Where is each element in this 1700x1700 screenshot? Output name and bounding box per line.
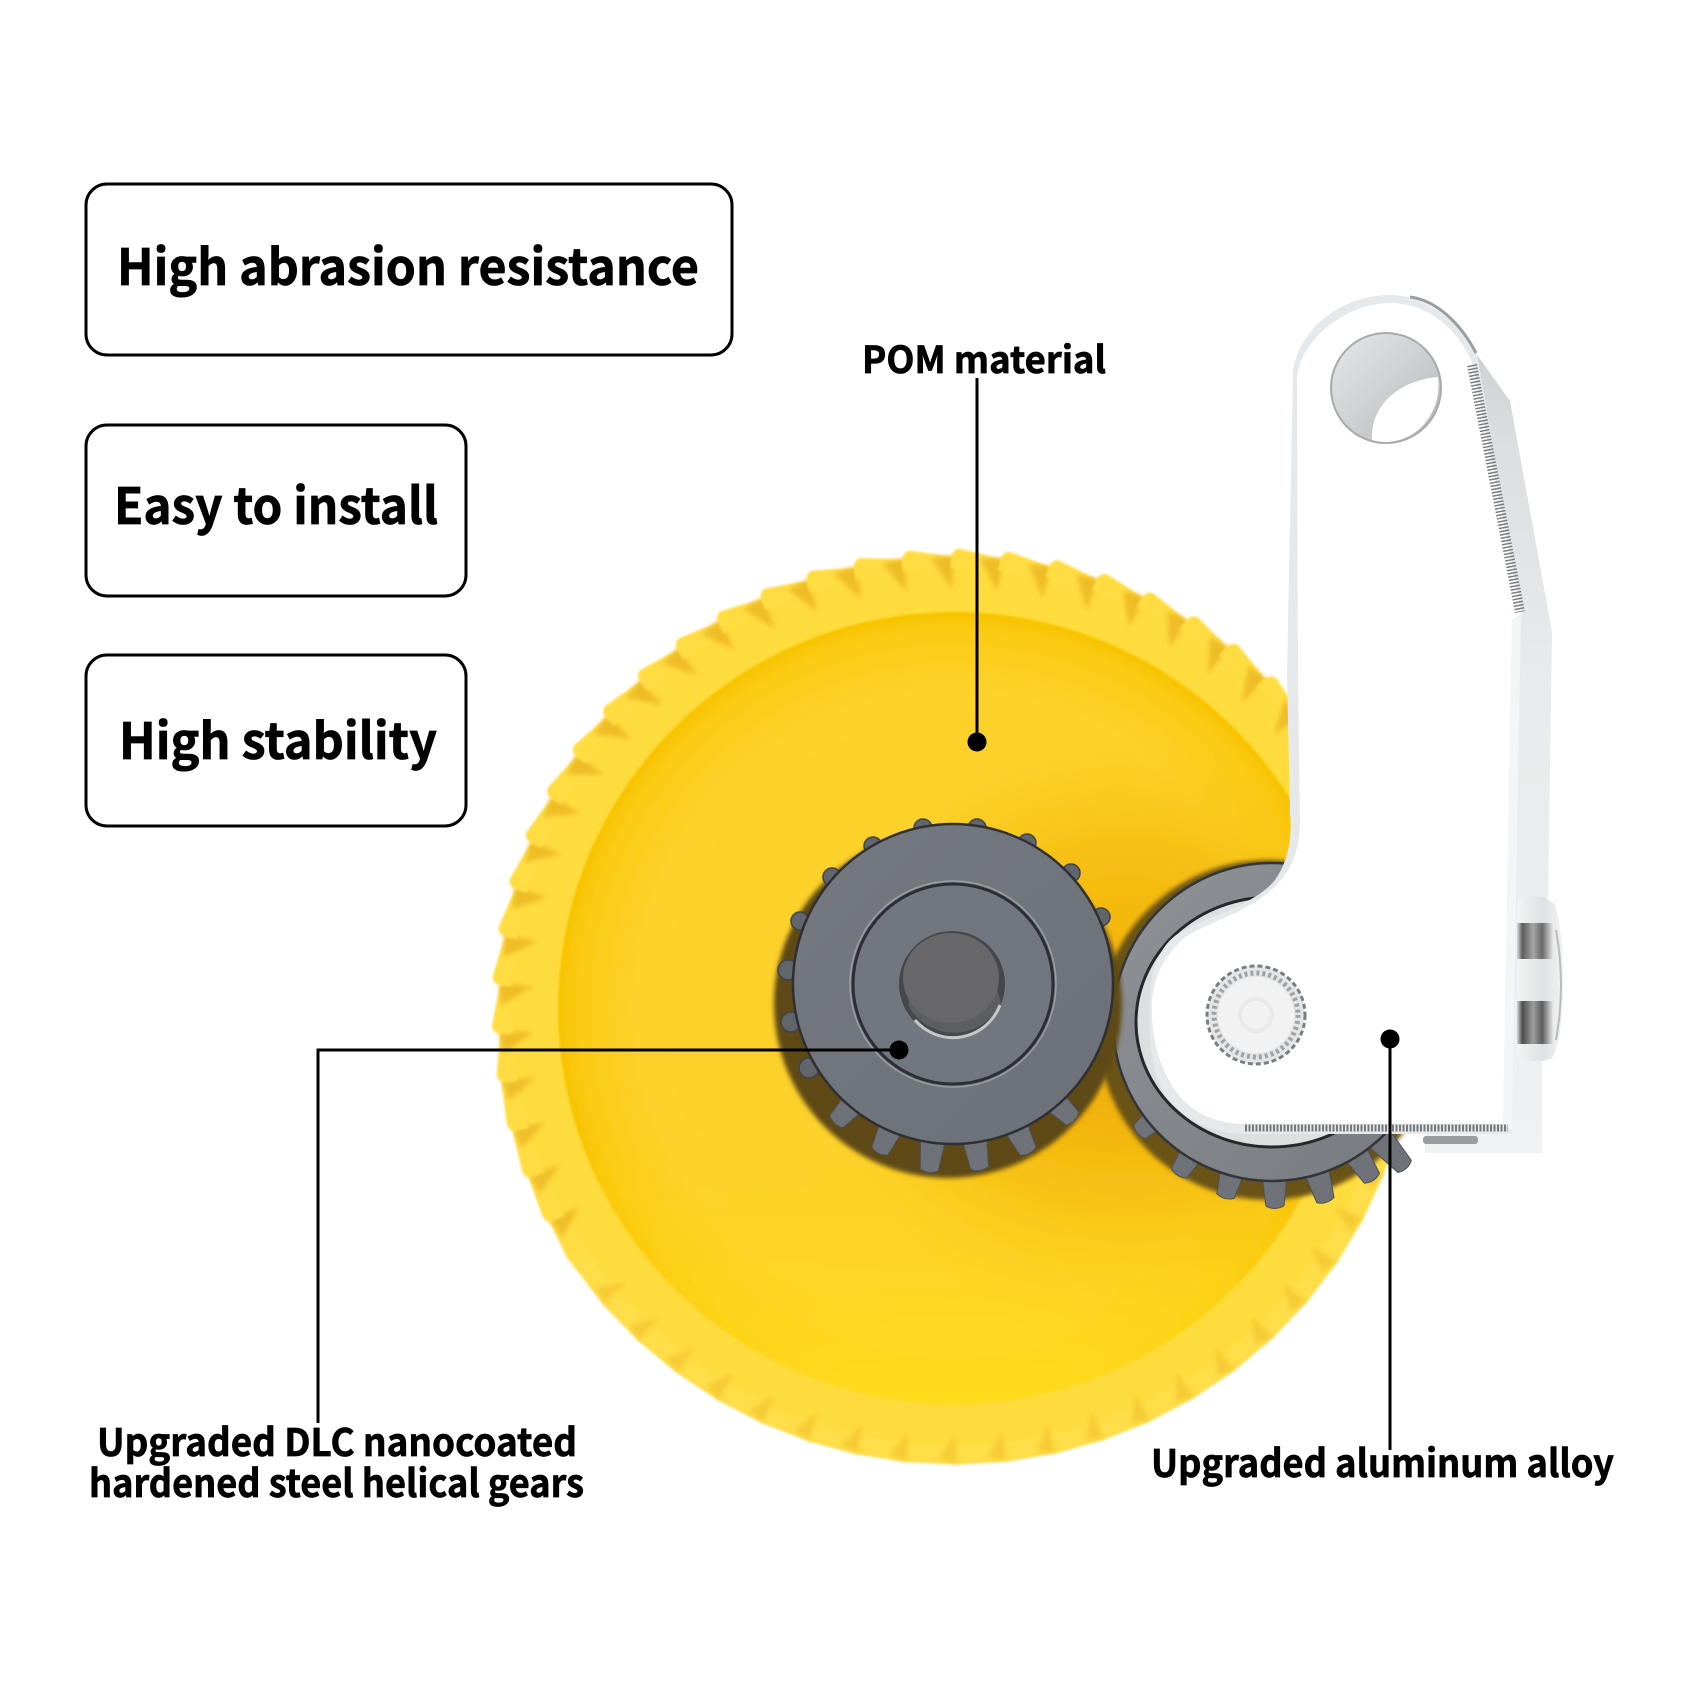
gear ring groove bbox=[853, 884, 1053, 1084]
callout: POM material: POM material bbox=[862, 330, 1106, 384]
callout: upgraded aluminum alloy: Upgraded aluminum alloy bbox=[1151, 1433, 1614, 1488]
bracket top rim shading bbox=[1410, 297, 1476, 353]
gear inner ring bbox=[1136, 897, 1408, 1147]
large yellow POM gear bbox=[492, 548, 1415, 1465]
feature box: high stability: High stability bbox=[119, 702, 437, 774]
gear teeth rim bbox=[492, 548, 1415, 1465]
gear side teeth bbox=[778, 819, 1110, 1078]
callout: upgraded DLC gears: Upgraded DLC nanocoated bbox=[97, 1412, 577, 1467]
second steel helical gear under the bracket bbox=[1098, 860, 1438, 1209]
feature box: high abrasion resistance bbox=[86, 184, 732, 355]
feature box: high abrasion resistance: High abrasion resistance bbox=[117, 228, 699, 300]
feature box: high stability bbox=[86, 655, 466, 826]
bracket serrated edge bbox=[1472, 365, 1520, 612]
bracket knurled screw bbox=[1207, 966, 1305, 1064]
bracket right side facet bbox=[1425, 345, 1552, 1153]
bracket main face bbox=[1152, 303, 1522, 1124]
bracket machined bottom strip bbox=[1245, 1124, 1508, 1132]
gear teeth bbox=[1129, 1093, 1417, 1209]
callout: upgraded aluminum alloy bbox=[1151, 1030, 1614, 1488]
gear face bbox=[1113, 863, 1431, 1181]
callout: POM material bbox=[862, 330, 1106, 752]
callout: upgraded DLC gears bbox=[89, 1040, 908, 1508]
gear shaft bbox=[899, 931, 1005, 1038]
gear shadow bbox=[774, 830, 1122, 1178]
gear face bbox=[793, 824, 1113, 1144]
bracket bright edge strip bbox=[1503, 616, 1521, 1130]
gear shadow bbox=[1098, 860, 1438, 1200]
gear bottom teeth bbox=[824, 1078, 1084, 1174]
bracket side bolt bbox=[1517, 896, 1563, 1061]
bracket mounting hole bbox=[1331, 333, 1441, 443]
bracket silhouette with bevel bbox=[1149, 295, 1522, 1134]
first steel helical gear with DLC coating bbox=[774, 819, 1122, 1178]
callout: upgraded DLC gears: hardened steel helical gears bbox=[89, 1453, 584, 1508]
bracket lower slit bbox=[1423, 1136, 1478, 1144]
aluminum bracket bbox=[1149, 295, 1563, 1153]
feature box: easy to install: Easy to install bbox=[114, 467, 438, 539]
feature box: easy to install bbox=[86, 425, 466, 596]
gear recessed disc bbox=[558, 612, 1350, 1404]
